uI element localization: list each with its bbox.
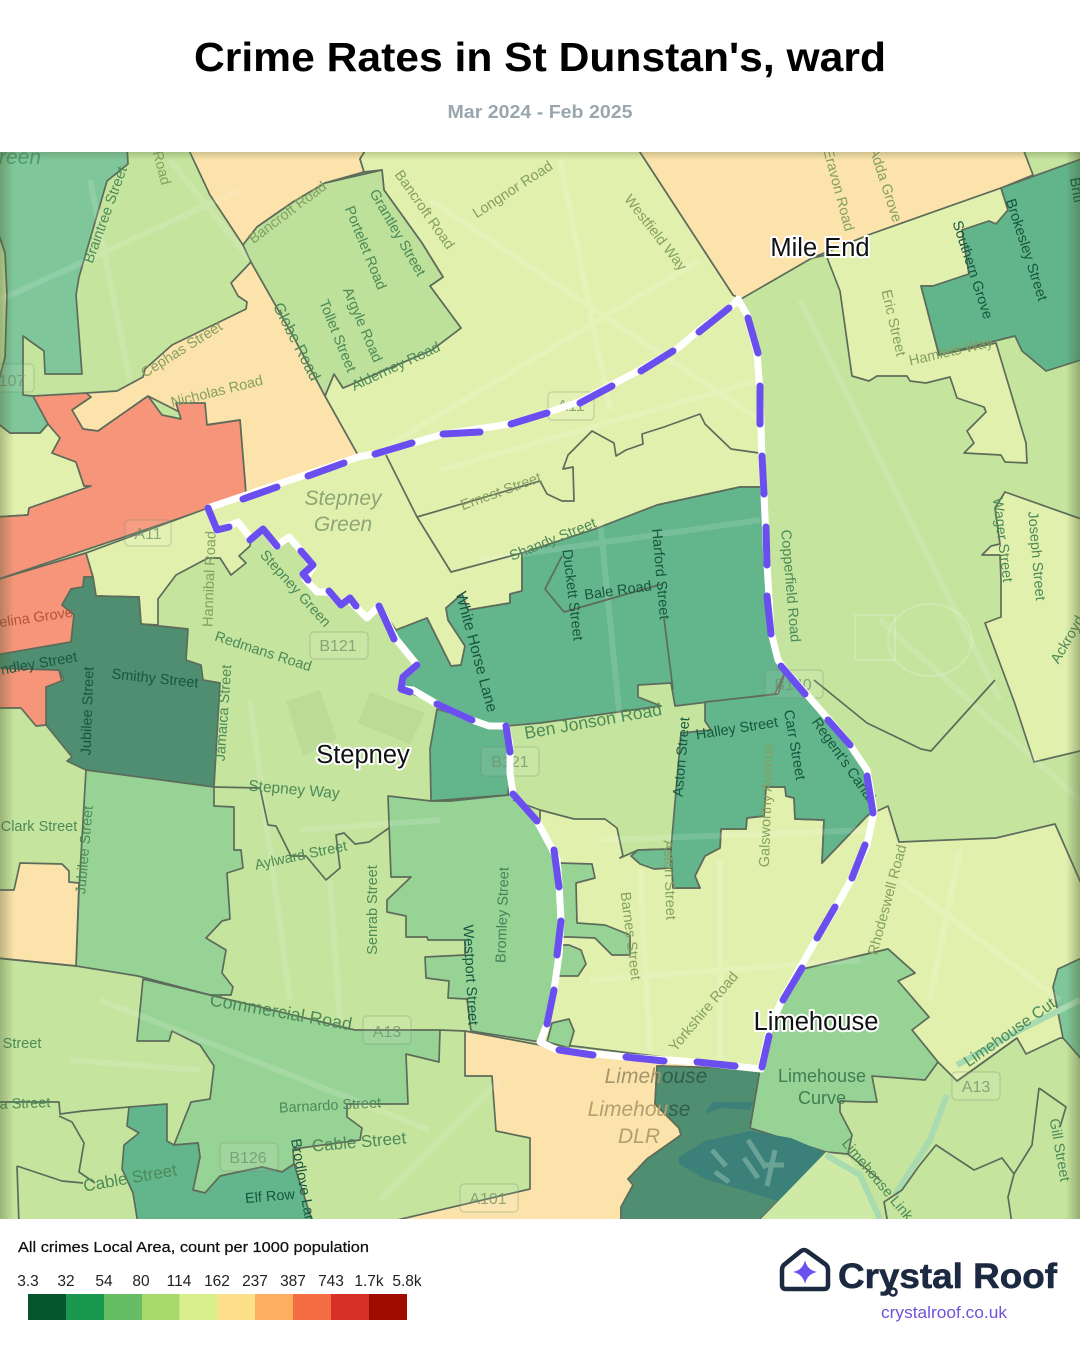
label: Limehouse station: Limehouse bbox=[605, 1065, 707, 1088]
street name labels: Adda Grove bbox=[865, 146, 905, 224]
street name labels: Bale Road bbox=[583, 578, 653, 604]
street name labels: Globe Road bbox=[269, 300, 323, 384]
street name labels: a Street bbox=[0, 1095, 51, 1113]
Stepney school grounds bbox=[286, 690, 425, 756]
street name labels: Barnardo Street bbox=[278, 1095, 382, 1117]
road number badges bbox=[0, 364, 1000, 1212]
street name labels: Brokesley Street bbox=[1002, 197, 1050, 303]
area: west cream bbox=[0, 863, 79, 966]
street name labels: Limehouse Link bbox=[838, 1136, 916, 1225]
street name labels: Aylward Street bbox=[253, 838, 349, 874]
label: Stepney Green station: Stepney bbox=[304, 487, 383, 510]
legend scale values: 387 bbox=[280, 1273, 306, 1290]
label: reen district fragment: reen bbox=[0, 146, 41, 169]
label: Limehouse Curve: Curve bbox=[798, 1088, 846, 1108]
area: pale below A11 bbox=[86, 508, 251, 625]
street name labels: Bancroft Road bbox=[246, 179, 330, 247]
legend scale values: 80 bbox=[132, 1273, 150, 1290]
ward boundary: St Dunstan's purple dashes bbox=[208, 308, 873, 1067]
road number badges: A13 bbox=[962, 1079, 990, 1096]
road number badges: B140 bbox=[774, 677, 812, 694]
street name labels: Stepney Way bbox=[248, 778, 341, 802]
street name labels: Elf Row bbox=[244, 1187, 296, 1207]
road number badges: B126 bbox=[229, 1150, 267, 1167]
street name labels: Nicholas Road bbox=[169, 373, 265, 411]
area: White Horse Lane dark green bbox=[396, 487, 785, 726]
street name labels: Barnes Street bbox=[617, 891, 643, 981]
road number badges: A11 bbox=[557, 398, 585, 415]
street name labels: Brodlove Lane bbox=[287, 1138, 319, 1232]
place label: Mile End: Mile End bbox=[770, 234, 870, 262]
street name labels: Joseph Street bbox=[1024, 511, 1048, 601]
water: Limehouse Basin bbox=[679, 1131, 824, 1203]
label: Limehouse DLR: Limehouse bbox=[588, 1098, 690, 1121]
street name labels: Shandy Street bbox=[507, 515, 599, 565]
area: B121 dark green bbox=[430, 709, 510, 801]
area: Stepney west green bbox=[76, 770, 243, 995]
street name labels: Copperfield Road bbox=[777, 529, 803, 643]
place label: Stepney: Stepney bbox=[316, 741, 410, 769]
street name labels: Hannibal Road bbox=[200, 531, 220, 627]
street name labels: Gill Street bbox=[1046, 1117, 1072, 1183]
street name labels: Smithy Street bbox=[111, 666, 199, 692]
street name labels: Bancroft Road bbox=[391, 167, 457, 253]
street name labels: White Horse Lane bbox=[452, 590, 500, 714]
area: Grantley Street green bbox=[243, 170, 461, 396]
street name labels: Grantley Street bbox=[366, 187, 428, 279]
label: Stepney Green station: Green bbox=[314, 513, 372, 536]
street name labels: Longnor Road bbox=[470, 158, 556, 222]
street name labels: Galsworthy Avenue bbox=[757, 742, 777, 868]
street name labels: Braintree Street bbox=[81, 165, 131, 265]
area: bottom cream bbox=[398, 1030, 702, 1219]
street name labels: Aston Street bbox=[671, 717, 693, 797]
legend scale values: 1.7k bbox=[354, 1273, 384, 1290]
area: south-east corner pale bbox=[761, 1152, 882, 1219]
legend scale values: 5.8k bbox=[392, 1273, 422, 1290]
area: Eric Street pale bbox=[812, 188, 1027, 463]
road number badges: B121 bbox=[491, 754, 529, 771]
legend scale values: 743 bbox=[318, 1273, 344, 1290]
area: small green blob bbox=[631, 849, 671, 869]
street name labels: Cephas Street bbox=[138, 319, 226, 381]
water: canals bbox=[826, 1000, 1080, 1219]
area: Bromley Street green bbox=[387, 794, 561, 1042]
area: small mid-green pockets bbox=[547, 863, 630, 1048]
area: Globe Road cream bbox=[72, 262, 358, 494]
street name labels: Alderney Road bbox=[349, 339, 443, 395]
subtitle: date range: Mar 2024 - Feb 2025 bbox=[448, 101, 632, 122]
decorative street grid bbox=[0, 160, 1080, 1200]
area: ward pale south bbox=[540, 787, 1080, 1081]
street name labels: Harford Street bbox=[648, 528, 672, 620]
area: top-right dark green bbox=[921, 158, 1080, 371]
legend scale values: 3.3 bbox=[17, 1273, 39, 1290]
area: north pale bbox=[208, 146, 764, 666]
logo url: crystalroof.co.uk bbox=[881, 1304, 1008, 1322]
label: Limehouse DLR: DLR bbox=[618, 1125, 660, 1148]
street name labels: Eric Street bbox=[878, 288, 908, 358]
area: salmon high-crime north bbox=[0, 393, 246, 580]
legend scale values: 237 bbox=[242, 1273, 268, 1290]
street name labels: Westfield Way bbox=[620, 192, 690, 275]
area: Limehouse darkest green bbox=[621, 1066, 826, 1224]
street name labels: Jamaica Street bbox=[213, 664, 235, 762]
street name labels: Yorkshire Road bbox=[666, 969, 742, 1055]
area: far-left pale bbox=[0, 422, 91, 517]
street name labels: Halley Street bbox=[695, 715, 779, 743]
street name labels: Senrab Street bbox=[365, 865, 381, 955]
street name labels: ndley Street bbox=[0, 649, 78, 679]
street name labels: Ben Jonson Road bbox=[523, 699, 663, 743]
street name labels: Road bbox=[149, 149, 173, 187]
street name labels: Jubilee Street bbox=[78, 666, 98, 756]
area: Joseph Street pale bbox=[982, 492, 1080, 762]
water: dock inlet bbox=[705, 1102, 753, 1114]
label: Limehouse Curve: Limehouse bbox=[778, 1066, 866, 1086]
street name labels: Cable Street bbox=[311, 1128, 407, 1156]
legend colour bar bbox=[28, 1294, 407, 1320]
street name labels: Jubilee Street bbox=[73, 805, 97, 895]
road number badges: A13 bbox=[373, 1024, 401, 1041]
legend scale values: 114 bbox=[167, 1273, 192, 1290]
logo: Crystal Roof bbox=[782, 1250, 1057, 1322]
icon: purple star bbox=[793, 1260, 817, 1284]
area: Limehouse Curve green bbox=[750, 949, 938, 1154]
road number badges: B121 bbox=[319, 638, 357, 655]
stadium outline bbox=[855, 604, 972, 676]
legend title: All crimes Local Area, count per 1000 population bbox=[18, 1239, 369, 1256]
street name labels: Southern Grove bbox=[949, 219, 995, 321]
ward subdivision lines bbox=[0, 414, 1066, 1224]
legend scale values: 162 bbox=[204, 1273, 230, 1290]
street name labels: Stepney Green bbox=[256, 547, 334, 631]
street name labels: Aston Street bbox=[660, 840, 678, 920]
place label: Limehouse: Limehouse bbox=[754, 1008, 878, 1036]
area: top-left green bbox=[0, 146, 128, 433]
legend scale values: 32 bbox=[57, 1273, 75, 1290]
area: Commercial Road green bbox=[137, 979, 440, 1193]
street name labels: Redmans Road bbox=[213, 629, 313, 675]
area: salmon high-crime south bbox=[0, 553, 93, 726]
icon: key ring on the y tail bbox=[890, 1288, 896, 1296]
logo wordmark: Crystal Roof bbox=[838, 1257, 1057, 1296]
street name labels: Argyle Road bbox=[339, 285, 385, 365]
street name labels: Ernest Street bbox=[459, 470, 543, 514]
area: Cable Street dark green bbox=[122, 1104, 313, 1224]
street name labels: Clark Street bbox=[1, 819, 77, 835]
street name labels: Hamlets Way bbox=[907, 334, 995, 369]
street name labels: Wager Street bbox=[989, 497, 1015, 583]
ward boundary: St Dunstan's white casing bbox=[208, 299, 874, 1069]
street name labels: Duckett Street bbox=[558, 548, 586, 642]
map edge vignette bbox=[0, 152, 1080, 1219]
area: darkest green Smithy Street bbox=[0, 577, 220, 787]
legend scale values bbox=[17, 1273, 422, 1290]
street name labels: Regent's Canal bbox=[808, 715, 878, 805]
road number badges: A101 bbox=[469, 1191, 507, 1208]
area: top cream bbox=[187, 146, 368, 245]
road number badges: A11 bbox=[134, 526, 162, 543]
street name labels: Westport Street bbox=[459, 924, 481, 1026]
street name labels: Portelet Road bbox=[341, 204, 389, 292]
street name labels: Rhodeswell Road bbox=[866, 843, 910, 957]
street name labels: Commercial Road bbox=[208, 990, 354, 1034]
street name labels: Carr Street bbox=[780, 709, 808, 781]
map base bbox=[0, 152, 1080, 1219]
street name labels: Cable Street bbox=[82, 1160, 178, 1196]
area: east-edge green bbox=[1053, 957, 1080, 1062]
legend scale values: 54 bbox=[95, 1273, 113, 1290]
street name labels: elina Grove bbox=[0, 605, 74, 631]
street name labels: Bromley Street bbox=[493, 867, 513, 963]
area: Aston Street dark green bbox=[671, 672, 874, 888]
street name labels: Tollet Street bbox=[315, 298, 359, 374]
area: top-right cream bbox=[636, 146, 1033, 299]
street name labels: Eravon Road bbox=[819, 147, 857, 233]
street name labels: Limehouse Cut bbox=[961, 995, 1059, 1071]
icon: marina jetties bbox=[712, 1140, 784, 1186]
icon: house outline bbox=[782, 1250, 828, 1289]
street name labels: Street bbox=[3, 1036, 41, 1052]
title: Crime Rates in St Dunstan's, ward bbox=[194, 34, 886, 80]
